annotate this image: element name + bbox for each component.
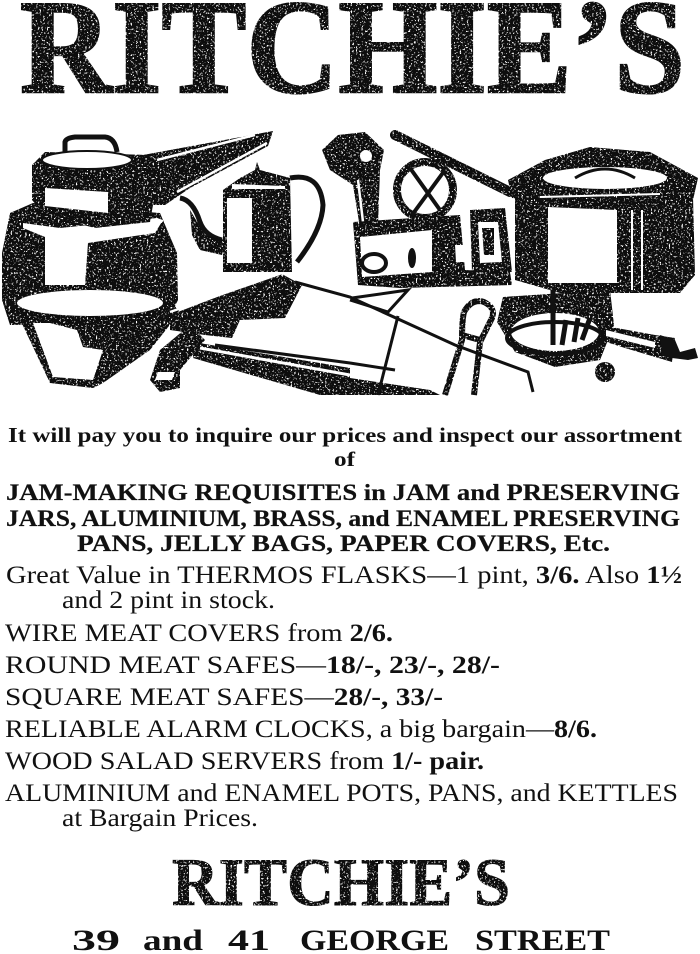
text: alarm clocks: RELIABLE ALARM CLOCKS, a big bargain— 8/6. bbox=[5, 716, 597, 743]
illustration: kitchenware bbox=[2, 131, 698, 395]
text: square meat safes: SQUARE MEAT SAFES— 28/-, 33/- bbox=[5, 684, 443, 711]
icon: long rod and cleaver bbox=[170, 273, 533, 392]
text: thermos flasks bbox=[6, 562, 682, 614]
heading: jam-making requisites bbox=[6, 480, 680, 556]
icon: large pot with lid bbox=[508, 147, 698, 293]
text: round meat safes: ROUND MEAT SAFES— 18/-, 23/-, 28/- bbox=[5, 652, 500, 679]
text: intro line: It will pay you to inquire our prices and inspect our assortment bbox=[8, 423, 682, 447]
footer address bbox=[72, 924, 610, 954]
icon: pliers bbox=[350, 290, 493, 395]
text: thermos flasks: Great Value in THERMOS FLASKS—1 pint, 3/6. Also 1½ bbox=[6, 562, 682, 589]
icon: coffee pot bbox=[180, 162, 323, 272]
icon: small frame bbox=[470, 208, 512, 272]
footer brand name: RITCHIE’S bbox=[172, 844, 510, 920]
icon: mincer box bbox=[353, 215, 512, 288]
text: pots pans kettles: at Bargain Prices. bbox=[62, 805, 258, 832]
text: thermos flasks: and 2 pint in stock. bbox=[62, 587, 275, 614]
icon: long pan handle bbox=[395, 135, 510, 192]
heading: jam-making requisites: PANS, JELLY BAGS, PAPER COVERS, Etc. bbox=[77, 531, 610, 556]
heading: jam-making requisites: JARS, ALUMINIUM, BRASS, and ENAMEL PRESERVING bbox=[6, 506, 680, 531]
text: pots pans kettles bbox=[5, 780, 678, 832]
text: of: of bbox=[334, 447, 356, 471]
icon: big pot bbox=[2, 203, 178, 325]
icon: rolling pin handle bbox=[150, 325, 440, 395]
icon: gas burner bbox=[497, 290, 614, 367]
icon: cog wheel bbox=[397, 162, 453, 218]
text: salad servers: WOOD SALAD SERVERS from 1/- pair. bbox=[5, 748, 484, 775]
heading: jam-making requisites: JAM-MAKING REQUISITES in JAM and PRESERVING bbox=[6, 480, 680, 505]
icon: enamel bowl bbox=[10, 290, 180, 388]
text: wire meat covers: WIRE MEAT COVERS from 2/6. bbox=[5, 620, 393, 647]
text: pots pans kettles: ALUMINIUM and ENAMEL POTS, PANS, and KETTLES bbox=[5, 780, 678, 807]
icon: burner pipe and nozzle bbox=[595, 325, 698, 382]
icon: saucepan with lid bbox=[32, 131, 273, 228]
icon: tin opener bbox=[322, 132, 384, 228]
